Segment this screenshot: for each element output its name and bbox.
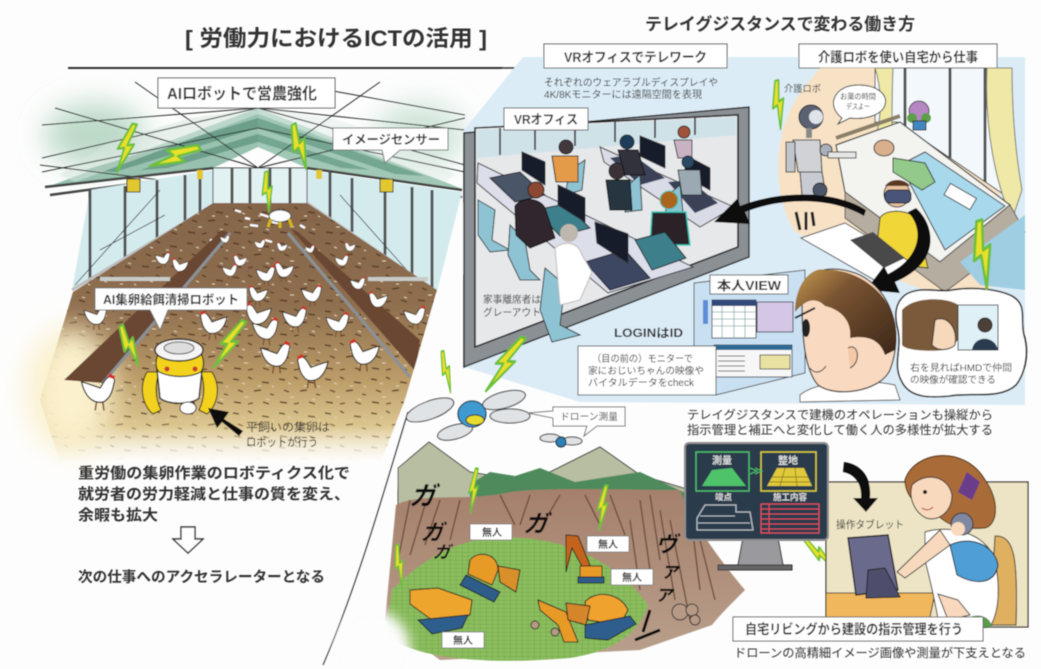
flower vase <box>907 101 931 130</box>
labels: unmanned: 無人 <box>453 634 473 647</box>
mountains <box>398 442 700 530</box>
rocks <box>531 604 700 636</box>
text: wearable displays: それぞれのウェアラブルディスプレイや <box>544 76 718 89</box>
operation tablet <box>848 535 900 598</box>
panel: telework blue background <box>464 57 1025 405</box>
labels: unmanned: 無人 <box>482 526 502 539</box>
text: wearable displays: 4K/8Kモニターには遠隔空間を表現 <box>544 88 702 101</box>
yellow glow at lower left <box>26 328 114 452</box>
note: floor egg collection: ロボットが行う <box>246 435 318 449</box>
cloud caption: 右を見ればHMDで仲間 <box>910 362 1012 374</box>
icon: distant collecting robot <box>268 210 292 228</box>
note: gray-out: グレーアウト <box>483 306 541 319</box>
heading: living room: 自宅リビングから建設の指示管理を行う <box>745 621 963 637</box>
heading: AI robot box <box>158 78 335 108</box>
desk <box>826 593 935 627</box>
thought cloud: HMD view <box>896 288 1026 397</box>
desk and keyboard <box>801 223 912 282</box>
title: [ 労働力におけるICTの活用 ] <box>185 26 487 51</box>
rear desk row <box>600 136 734 227</box>
arrow: hollow down <box>173 527 203 553</box>
text block: robotics benefits: 重労働の集卵作業のロボティクス化で <box>78 464 350 482</box>
construction content table <box>761 492 819 533</box>
arrow: to VR office <box>714 194 866 224</box>
onomatopoeia: ガ <box>419 521 449 545</box>
character: large face <box>795 269 900 402</box>
arrow: to own view <box>866 208 931 293</box>
barn roof <box>40 82 465 197</box>
label: image sensor: イメージセンサー <box>342 133 440 147</box>
icons: site signal bolts <box>389 469 844 587</box>
text: drone imagery: ドローンの高精細イメージ画像や測量が下支えとなる <box>734 645 1026 660</box>
panel: construction site <box>334 442 844 669</box>
heading: care robot <box>799 44 997 68</box>
green survey ground <box>385 537 648 661</box>
bulldozer 1 <box>460 554 520 602</box>
front chairs <box>478 200 580 342</box>
white fade at lower left <box>334 610 410 669</box>
label: drone survey: ドローン測量 <box>560 410 618 423</box>
labels: unmanned <box>442 524 653 648</box>
labels: unmanned: 無人 <box>622 571 642 584</box>
arrow: curved down <box>843 462 878 512</box>
chickens <box>82 234 425 410</box>
peach room background <box>778 68 1020 293</box>
on-screen windows <box>703 300 793 377</box>
tablet label: 操作タブレット <box>836 518 904 531</box>
icon: image sensors <box>127 170 393 192</box>
patient <box>874 140 935 190</box>
text: wearable displays <box>544 76 718 101</box>
text block: robotics benefits: 就労者の労力軽減と仕事の質を変え、 <box>78 485 350 503</box>
heading: living room <box>733 617 983 641</box>
onomatopoeia <box>407 482 684 640</box>
panel: care room <box>778 68 1025 293</box>
callout: monitor check: （目の前の）モニターで <box>592 352 693 365</box>
note: floor egg collection <box>246 420 330 449</box>
barn walls <box>72 168 462 292</box>
white diagonal divider with black rule <box>300 60 525 669</box>
arrow to egg <box>208 408 243 436</box>
survey panel <box>696 452 749 491</box>
care robot <box>786 105 856 230</box>
cloud caption <box>910 362 1012 386</box>
text: telexistence construction: 指示管理と補正へと変化して働く人の多様性が拡大する <box>687 422 993 437</box>
icon: small drone <box>540 434 582 447</box>
speech bubble: medicine time: デスよー <box>846 101 870 111</box>
label: VR office <box>504 108 588 130</box>
callout: monitor check <box>578 346 716 395</box>
label: care robot: 介護ロボ <box>784 83 821 95</box>
text: telexistence construction: テレイグジスタンスで建機のオペレーションも操縦から <box>687 407 993 422</box>
feed troughs <box>64 228 428 383</box>
text: LOGIN: LOGINはID <box>614 326 683 340</box>
dump carrier <box>410 588 472 634</box>
HMD view scene <box>902 299 998 351</box>
front desk row <box>477 152 693 293</box>
window <box>875 68 1022 220</box>
heading: VR office telework <box>544 44 727 68</box>
callout: monitor check: バイタルデータをcheck <box>588 376 694 389</box>
label: own view: 本人VIEW <box>717 278 781 293</box>
icon: large drone <box>403 387 530 443</box>
speech bubble: medicine time <box>833 85 886 124</box>
chair <box>990 536 1017 625</box>
heading: VR office telework: VRオフィスでテレワーク <box>564 50 707 65</box>
hospital bed <box>836 116 1025 292</box>
front avatars <box>515 182 592 305</box>
onomatopoeia: ガ <box>431 542 455 562</box>
onomatopoeia: ァ <box>653 583 679 605</box>
woman and baby <box>897 456 998 630</box>
text: telexistence construction <box>687 407 993 437</box>
onomatopoeia: ヴ <box>654 531 683 557</box>
panel: VR office monitor <box>464 107 749 367</box>
grading panel: 整地 <box>778 454 798 467</box>
teal chairs rear <box>565 160 685 230</box>
grading panel <box>761 452 816 491</box>
speech bubble: medicine time: お薬の時間 <box>840 91 876 101</box>
green halo around roof <box>45 103 465 167</box>
monitor: survey and grading <box>685 443 828 570</box>
callout: monitor check: 家におじいちゃんの映像や <box>588 364 704 377</box>
icons: signal bolts right <box>435 80 1003 397</box>
label: AI egg robot: AI集卵給餌清掃ロボット <box>103 292 239 307</box>
avatars rear <box>552 126 702 245</box>
large bulldozer <box>538 594 636 642</box>
progress icon: 竣点 <box>715 492 733 502</box>
remote worker with HMD <box>875 180 928 268</box>
construction content table: 施工内容 <box>773 492 808 502</box>
note: floor egg collection: 平飼いの集卵は <box>246 420 330 434</box>
labels: unmanned: 無人 <box>598 538 618 551</box>
brown cliffs <box>385 489 745 660</box>
onomatopoeia: ァ <box>659 560 684 582</box>
text: accelerator: 次の仕事へのアクセラレーターとなる <box>78 568 325 586</box>
text block: robotics benefits <box>78 464 350 524</box>
heading: care robot: 介護ロボを使い自宅から仕事 <box>818 49 978 65</box>
survey panel: 測量 <box>712 454 732 467</box>
text block: robotics benefits: 余暇も拡大 <box>78 506 158 524</box>
cloud caption: の映像が確認できる <box>910 374 996 386</box>
label: VR office: VRオフィス <box>514 112 578 127</box>
progress icon <box>697 492 753 530</box>
onomatopoeia: ガ <box>521 511 554 538</box>
barn floor <box>40 203 437 462</box>
label: image sensor <box>333 128 448 163</box>
note: gray-out: 家事離席者は <box>483 293 541 306</box>
panel: living room <box>826 456 1028 630</box>
onomatopoeia: ガ <box>407 482 442 511</box>
icon: AI egg collecting robot <box>142 339 217 414</box>
panel: personal view <box>694 270 805 395</box>
heading: telexistence: テレイグジスタンスで変わる働き方 <box>645 14 915 34</box>
label: drone survey <box>528 407 625 436</box>
panel: AI robot poultry barn <box>26 82 465 462</box>
label: AI egg robot <box>95 288 247 330</box>
heading: AI robot box: AIロボットで営農強化 <box>167 84 317 103</box>
excavator <box>566 535 604 583</box>
icons: wireless signal bolts <box>111 121 318 372</box>
note: gray-out <box>483 293 541 319</box>
